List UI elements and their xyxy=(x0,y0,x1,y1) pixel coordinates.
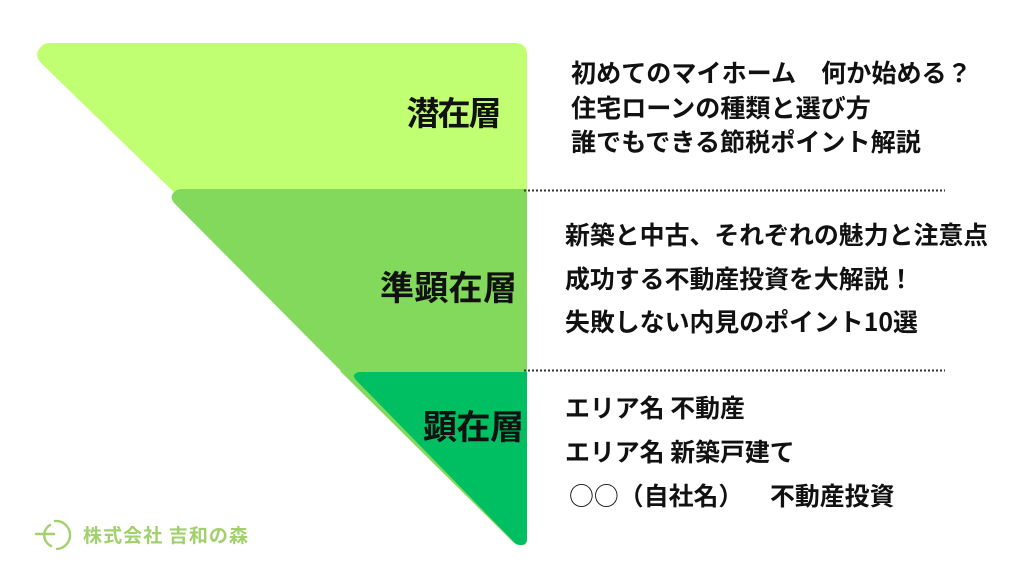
divider: upper dotted line xyxy=(524,190,945,192)
text block: bottom tier keywords: 不動産投資 xyxy=(770,477,895,513)
company name: 株式会社 吉和の森 xyxy=(83,521,248,548)
text block: bottom tier keywords: エリア名 新築戸建て xyxy=(565,433,795,469)
text block: bottom tier keywords: ○○（自社名） xyxy=(569,477,743,513)
panel: bottom tier outline xyxy=(340,371,527,545)
divider: lower dotted line xyxy=(524,370,945,372)
logo: company mark and name xyxy=(36,521,248,549)
funnel: inverted triangle xyxy=(37,43,527,545)
panel: bottom tier triangle xyxy=(354,372,527,545)
text block: top tier keywords xyxy=(571,54,972,159)
text block: top tier keywords: 誰でもできる節税ポイント解説 xyxy=(571,123,921,159)
icon: circular leaf mark xyxy=(36,521,70,549)
text block: bottom tier keywords xyxy=(565,389,895,513)
heading: bottom tier: 顕在層 xyxy=(423,400,524,449)
heading: top tier: 潜在層 xyxy=(406,87,502,135)
text block: middle tier keywords xyxy=(565,216,988,339)
heading: middle tier: 準顕在層 xyxy=(380,261,517,310)
panel: middle tier band xyxy=(172,189,527,373)
text block: top tier keywords: 初めてのマイホーム 何か始める？ xyxy=(571,54,972,90)
text block: middle tier keywords: 失敗しない内見のポイント10選 xyxy=(565,303,918,339)
text block: top tier keywords: 住宅ローンの種類と選び方 xyxy=(571,89,871,125)
panel: top tier band xyxy=(37,43,527,200)
text block: bottom tier keywords: エリア名 不動産 xyxy=(565,389,745,425)
text block: middle tier keywords: 新築と中古、それぞれの魅力と注意点 xyxy=(565,216,988,252)
text block: middle tier keywords: 成功する不動産投資を大解説！ xyxy=(565,260,913,296)
